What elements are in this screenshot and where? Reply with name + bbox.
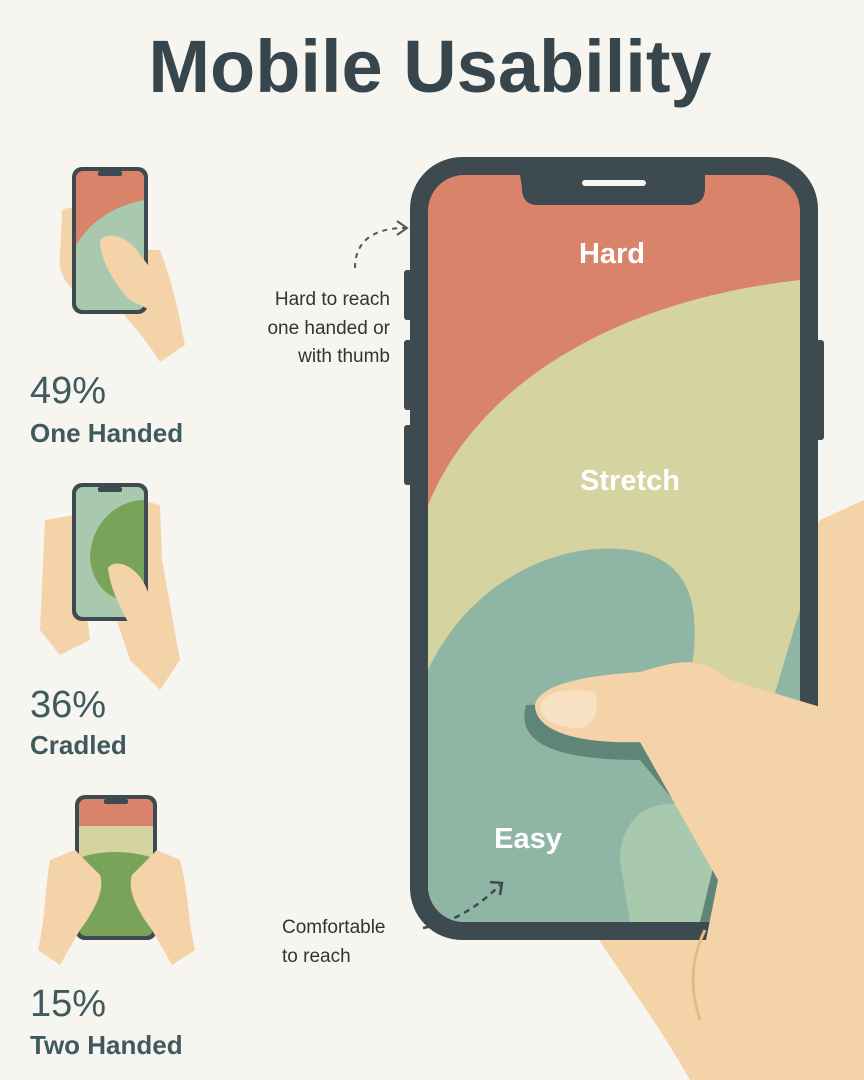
zone: stretch	[428, 280, 800, 922]
callout: comfortable	[282, 882, 502, 967]
callout: hard to reach: one handed or	[267, 318, 391, 339]
label: easy: Easy	[494, 823, 562, 855]
panel: two handed	[30, 795, 195, 1060]
callout: comfortable: Comfortable	[282, 917, 386, 938]
zone: hard	[428, 175, 800, 922]
panel: cradled: Cradled	[30, 730, 127, 760]
icon: two hands phone	[75, 795, 157, 940]
notch	[520, 175, 705, 205]
panel: one handed: One Handed	[30, 418, 183, 448]
panel: two handed: Two Handed	[30, 1030, 183, 1060]
label: stretch: Stretch	[580, 465, 680, 497]
arrow	[423, 885, 500, 928]
label: hard: Hard	[579, 238, 645, 270]
arrow	[355, 228, 405, 268]
callout: hard to reach: Hard to reach	[275, 289, 390, 310]
title: Mobile Usability	[148, 25, 712, 108]
side buttons	[404, 270, 412, 320]
phone body	[410, 157, 818, 940]
callout: hard to reach	[267, 221, 407, 367]
thumb shadow	[524, 704, 718, 922]
panel: cradled: 36%	[30, 684, 106, 726]
big phone illustration	[404, 157, 864, 1080]
panel: one handed	[30, 167, 185, 448]
panel: cradled	[30, 483, 180, 760]
thumb	[535, 662, 864, 1080]
hand back	[580, 500, 864, 1080]
icon: cradled phone	[40, 515, 90, 655]
icon: one hand phone	[60, 208, 75, 290]
callout: hard to reach: with thumb	[297, 346, 390, 367]
zone: easy	[428, 548, 800, 922]
callout: comfortable: to reach	[282, 946, 351, 967]
panel: one handed: 49%	[30, 370, 106, 412]
panel: two handed: 15%	[30, 983, 106, 1025]
